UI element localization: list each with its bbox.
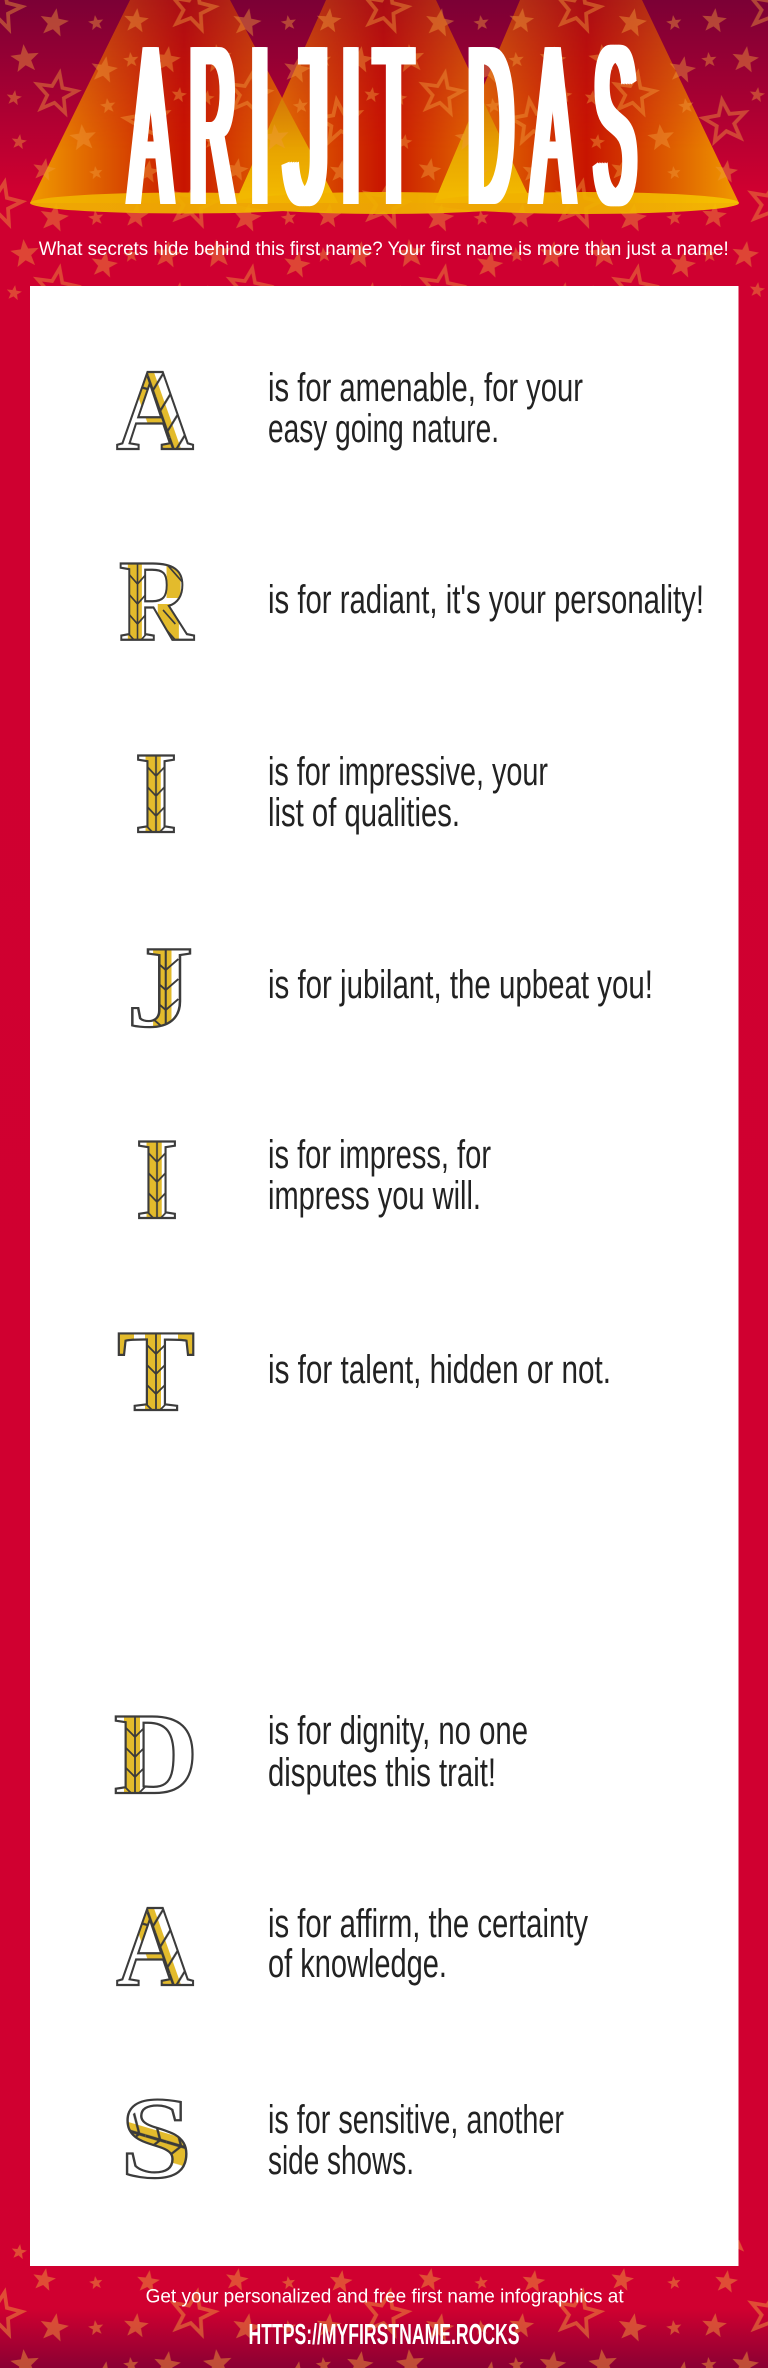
icon: letter D: D: [114, 1690, 198, 1819]
spotlight pools: [30, 192, 739, 214]
text: impress: impress you will.: [268, 1174, 481, 1218]
text: dignity: disputes this trait!: [268, 1751, 496, 1795]
row: A for amenable: [116, 346, 583, 475]
text: talent: is for talent, hidden or not.: [268, 1348, 611, 1392]
star pattern: header: [0, 0, 768, 302]
text: impressive: is for impressive, your: [268, 750, 548, 794]
row: I for impress: [135, 1113, 491, 1244]
text: sensitive: is for sensitive, another: [268, 2098, 564, 2142]
subtitle: What secrets hide behind this first name? Your first name is more than just a name!: [39, 238, 729, 260]
row: J for jubilant: [126, 923, 653, 1052]
footer url: HTTPS://MYFIRSTNAME.ROCKS: [248, 2319, 520, 2351]
row: T for talent: [117, 1307, 611, 1436]
row: I for impressive: [134, 727, 548, 858]
title: J: [285, 0, 368, 253]
icon: letter A: A: [116, 346, 194, 475]
row: D for dignity: [114, 1690, 528, 1819]
text: amenable: easy going nature.: [268, 407, 499, 451]
title: ARI IT DAS: [130, 0, 635, 253]
text: impress: is for impress, for: [268, 1133, 491, 1177]
text: dignity: is for dignity, no one: [268, 1709, 528, 1753]
footer prompt: Get your personalized and free first name infographics at: [146, 2286, 624, 2308]
text: impressive: list of qualities.: [268, 791, 460, 835]
text: affirm: of knowledge.: [268, 1942, 447, 1986]
row: S for sensitive: [120, 2072, 564, 2203]
row: A for affirm: [116, 1882, 588, 2011]
text: affirm: is for affirm, the certainty: [268, 1902, 588, 1946]
icon: letter T: T: [117, 1307, 195, 1436]
star pattern: footer: [0, 2240, 768, 2368]
icon: letter R: R: [119, 536, 195, 665]
icon: letter I: I: [135, 1113, 179, 1244]
panel: white content card: [30, 286, 738, 2266]
icon: letter I: I: [134, 727, 178, 858]
icon: letter J: J: [126, 923, 194, 1052]
icon: letter S: S: [120, 2072, 192, 2203]
spotlights: [30, 0, 739, 203]
icon: letter A: A: [116, 1882, 194, 2011]
text: sensitive: side shows.: [268, 2139, 414, 2183]
row: R for radiant: [119, 536, 704, 665]
text: amenable: is for amenable, for your: [268, 366, 583, 410]
